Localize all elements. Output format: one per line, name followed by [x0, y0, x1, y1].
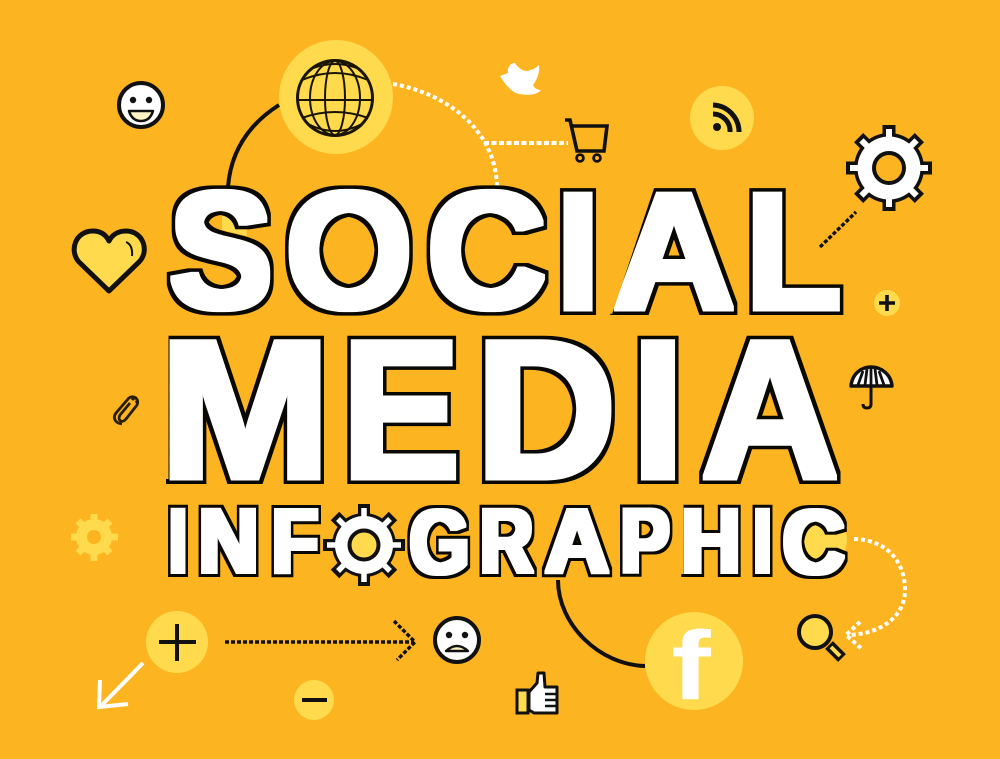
title: MEDIA: D — [476, 299, 616, 520]
title: INFOGRAPHIC: F — [272, 490, 318, 592]
title: SOCIAL: L — [746, 159, 841, 345]
title: MEDIA: A — [701, 299, 839, 521]
icon: thumbs up — [517, 673, 557, 713]
icon: small plus — [874, 290, 900, 316]
title: MEDIA: M — [159, 299, 331, 520]
title: MEDIA: E — [343, 299, 459, 520]
icon: minus — [294, 680, 334, 720]
title: INFOGRAPHIC: R — [480, 490, 533, 592]
title: SOCIAL — [169, 158, 841, 345]
title: INFOGRAPHIC — [169, 489, 845, 593]
title: SOCIAL: O — [285, 158, 413, 344]
title: INFOGRAPHIC: P — [621, 490, 669, 592]
connector: white dotted arc from globe — [393, 84, 497, 186]
icon: gear replacing O in INFOGRAPHIC — [323, 504, 405, 586]
icon: large gear — [846, 125, 932, 211]
title: MEDIA — [159, 299, 839, 521]
connector: dashed line to gear — [820, 212, 856, 247]
icon: umbrella — [851, 367, 892, 408]
icon: paperclip — [114, 397, 138, 424]
icon: magnifier — [799, 616, 842, 658]
icon: twitter bird — [500, 63, 541, 95]
title: INFOGRAPHIC: A — [545, 490, 609, 593]
title: SOCIAL: A — [613, 158, 735, 345]
highlight: yellow circle behind final C — [793, 513, 847, 567]
outline gap: left edge of A in SOCIAL — [609, 187, 651, 313]
icon: facebook — [645, 611, 743, 720]
icon: large plus — [146, 611, 208, 673]
outline gap: left edge of H in INFOGRAPHIC — [678, 503, 684, 574]
title: INFOGRAPHIC: I — [169, 489, 187, 592]
title: MEDIA: I — [632, 299, 684, 520]
title: INFOGRAPHIC: C — [782, 491, 845, 593]
connector: white dotted line to cart — [484, 141, 568, 145]
title: INFOGRAPHIC: N — [198, 490, 259, 592]
title: INFOGRAPHIC: H — [681, 491, 741, 592]
outline gap: left edge of M in MEDIA — [162, 334, 168, 479]
arrow: white dotted curve to magnifier — [846, 539, 905, 650]
connector: black arc from globe to title — [228, 105, 279, 187]
arrow: white diagonal — [99, 663, 143, 707]
connector: black arc to facebook — [558, 580, 645, 666]
title: INFOGRAPHIC: G — [410, 491, 469, 593]
title: SOCIAL: C — [427, 158, 546, 344]
icon: smiley face — [119, 83, 163, 127]
icon: facebook: f — [671, 611, 712, 720]
icon: sad face — [435, 618, 479, 662]
icon: heart — [74, 231, 144, 291]
icon: rss — [690, 86, 754, 150]
title: INFOGRAPHIC: I — [754, 489, 771, 592]
title: SOCIAL: S — [169, 158, 273, 344]
title: SOCIAL: I — [557, 159, 599, 345]
icon: globe — [279, 40, 393, 154]
highlight: yellow patch inside S — [222, 212, 247, 236]
icon: shopping cart — [565, 120, 607, 161]
icon: pale gear — [71, 514, 118, 561]
arrow: black dotted — [225, 621, 415, 660]
